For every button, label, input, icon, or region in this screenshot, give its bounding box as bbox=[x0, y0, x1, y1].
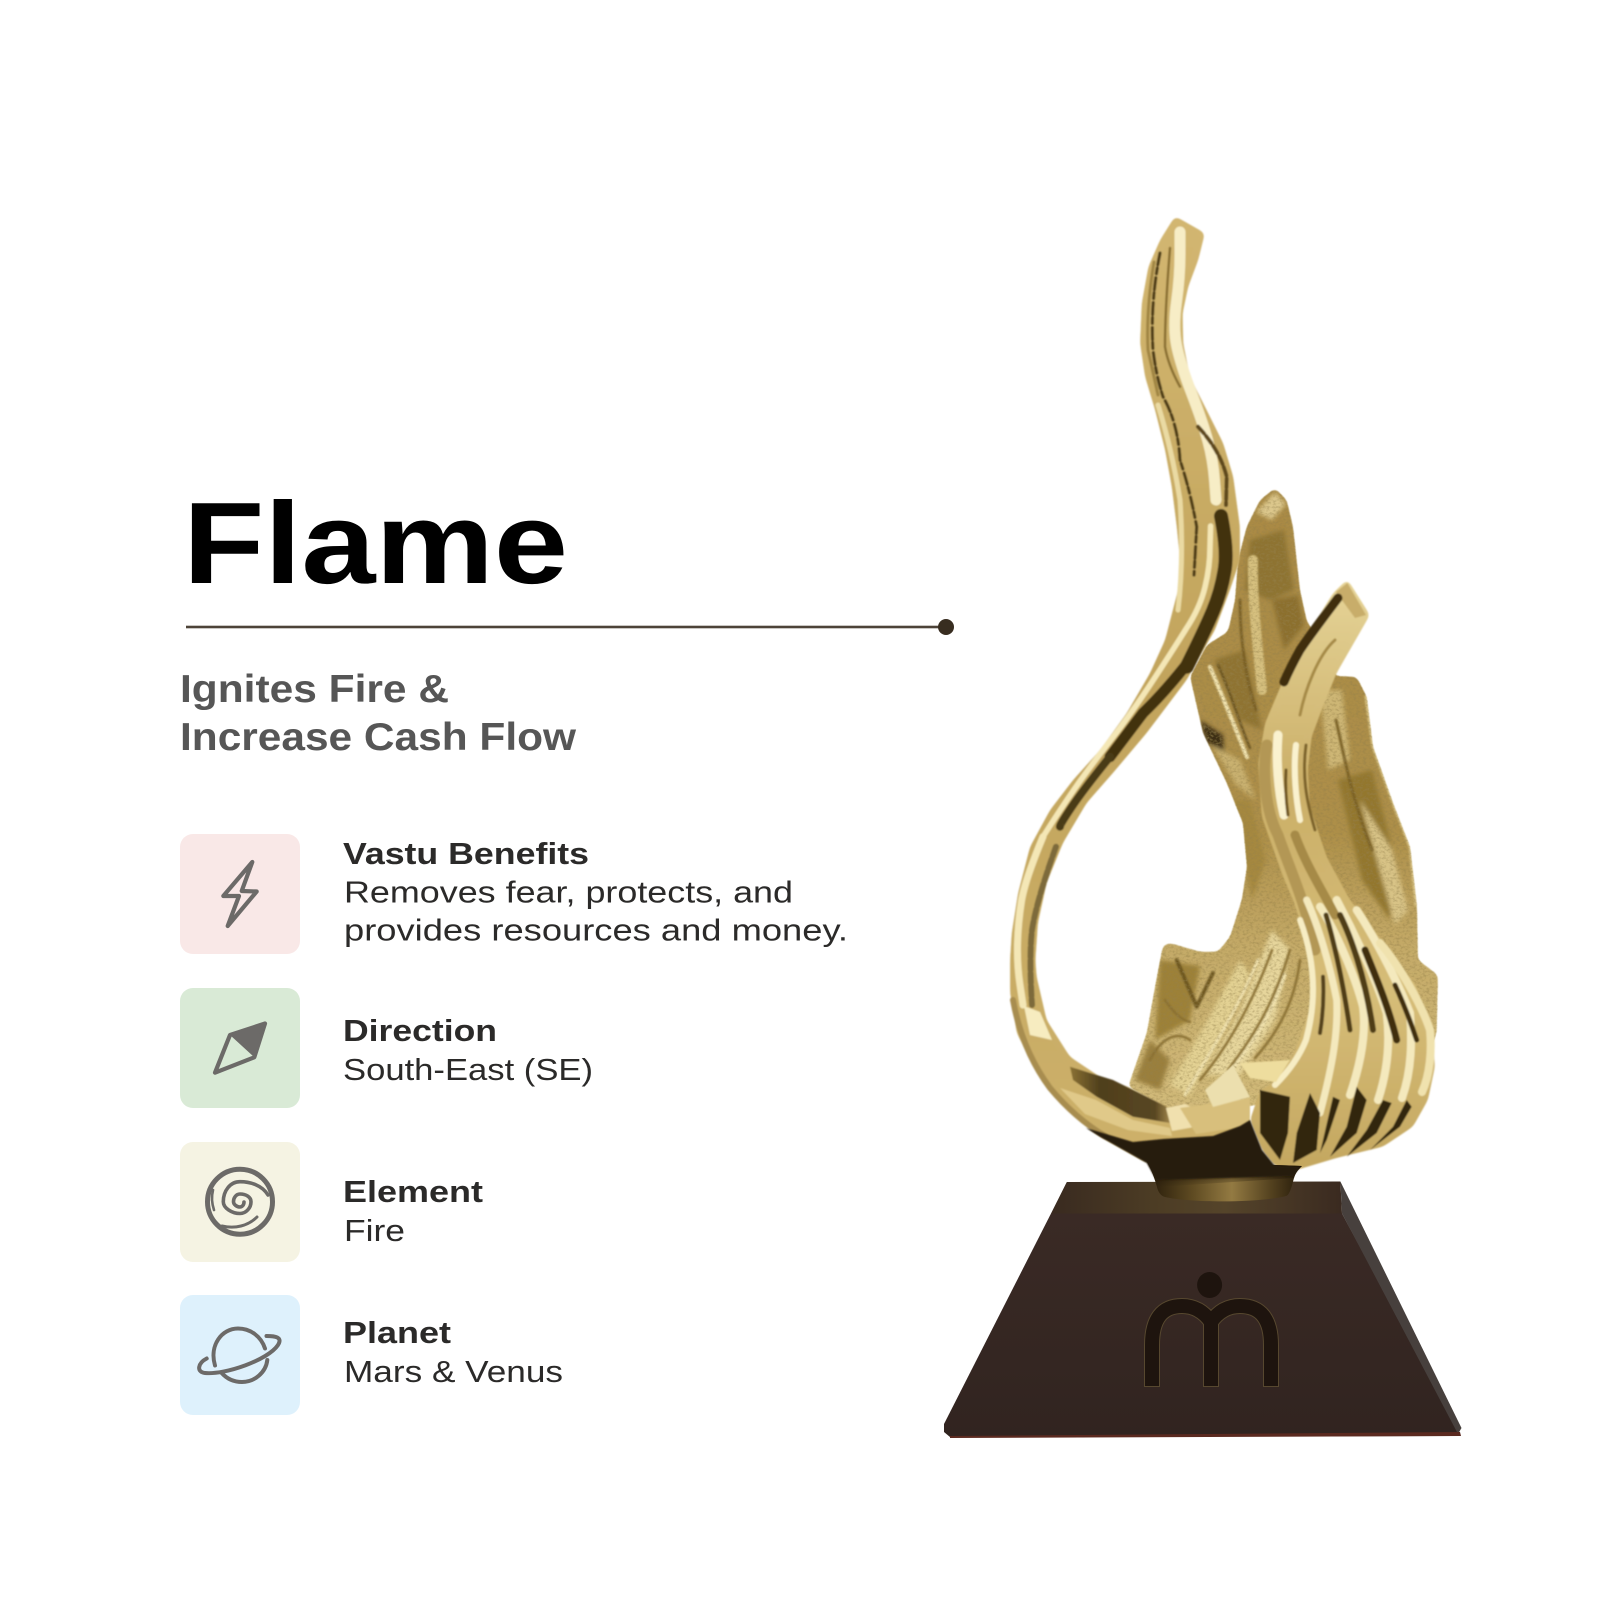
title: Flame bbox=[183, 478, 568, 608]
text: vastu benefits: Vastu Benefits bbox=[343, 837, 589, 871]
leaf shading bbox=[1135, 492, 1416, 1095]
dark grooves bbox=[1320, 977, 1323, 1033]
icon tile: spiral bbox=[180, 1142, 300, 1262]
ribbed front petal bbox=[1205, 579, 1435, 1170]
ribbon ridges and highlights bbox=[1013, 232, 1227, 1136]
text: vastu benefits bbox=[343, 837, 848, 948]
pyramid base bbox=[944, 1182, 1462, 1438]
light ridges bbox=[1307, 900, 1337, 1113]
lower ribbon shadow bbox=[1070, 1067, 1170, 1123]
neck bbox=[1146, 1160, 1302, 1201]
icon tile: compass needle bbox=[180, 988, 300, 1108]
text: planet bbox=[343, 1316, 563, 1389]
crease highlights bbox=[1205, 1065, 1250, 1107]
text: direction: Direction bbox=[343, 1014, 497, 1048]
panel: direction bbox=[180, 988, 593, 1108]
fan wedges bbox=[1260, 1087, 1412, 1163]
text: planet: Mars & Venus bbox=[344, 1354, 563, 1389]
text: planet: Planet bbox=[343, 1316, 451, 1350]
subtitle: Ignites Fire & bbox=[180, 668, 449, 711]
panel: element bbox=[180, 1142, 483, 1262]
text: element: Fire bbox=[344, 1213, 405, 1248]
main curling ribbon bbox=[1010, 216, 1250, 1163]
text: direction: South-East (SE) bbox=[343, 1052, 593, 1087]
divider line with end dot bbox=[186, 619, 954, 635]
back leaves and bowl bbox=[1128, 488, 1438, 1110]
text: element bbox=[343, 1175, 483, 1248]
text: vastu benefits: Removes fear, protects, and bbox=[344, 874, 793, 910]
engraved logo bbox=[1152, 1272, 1271, 1387]
text: element: Element bbox=[343, 1175, 483, 1209]
text: vastu benefits: provides resources and money. bbox=[344, 912, 848, 948]
panel: vastu benefits bbox=[180, 834, 848, 954]
dark underside bbox=[1086, 1120, 1300, 1180]
polished petal stripes bbox=[1265, 745, 1315, 950]
brass flame sculpture on base bbox=[944, 216, 1462, 1438]
icon tile: ringed planet bbox=[180, 1295, 300, 1415]
panel: planet bbox=[180, 1295, 563, 1415]
icon tile: lightning bolt bbox=[180, 834, 300, 954]
text: direction bbox=[343, 1014, 593, 1087]
subtitle bbox=[180, 668, 577, 759]
subtitle: Increase Cash Flow bbox=[180, 716, 577, 759]
